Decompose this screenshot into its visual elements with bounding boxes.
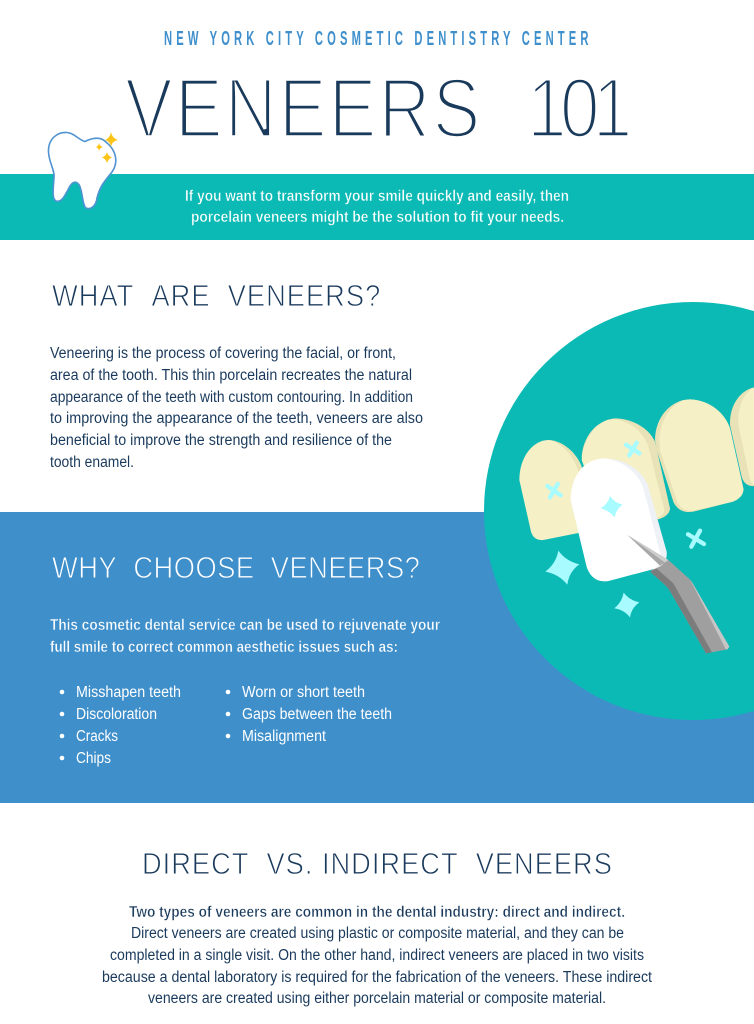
paragraph: what are veneers: appearance of the teeth with custom contouring. In addition [50, 389, 413, 406]
lead text: full smile to correct common aesthetic issues such as: [50, 639, 398, 656]
yellow tooth middle [582, 418, 670, 519]
list: left column: Discoloration [76, 706, 157, 723]
sparkles [545, 496, 639, 617]
paragraph: what are veneers: to improving the appearance of the teeth, veneers are also [50, 410, 423, 427]
paragraph: direct vs indirect: because a dental laboratory is required for the fabrication of the veneers. These indirect [102, 969, 653, 986]
paragraph: what are veneers: area of the tooth. This thin porcelain recreates the natural [50, 367, 412, 384]
paragraph: what are veneers [50, 345, 423, 471]
veneer [571, 458, 667, 581]
paragraph: direct vs indirect [102, 904, 653, 1007]
list: right column: Misalignment [242, 728, 327, 745]
paragraph: what are veneers: beneficial to improve the strength and resilience of the [50, 432, 392, 449]
yellow tooth large [655, 399, 743, 512]
list: left column: Cracks [76, 728, 118, 745]
far right tooth [730, 387, 754, 486]
intro text: If you want to transform your smile quickly and easily, then [185, 188, 569, 205]
paragraph: direct vs indirect: completed in a single visit. On the other hand, indirect veneers are placed in two visits [110, 947, 644, 964]
paragraph: direct vs indirect: veneers are created using either porcelain material or composite material. [148, 990, 606, 1007]
heading: what are veneers: WHAT ARE VENEERS? [52, 279, 380, 313]
title: VENEERS [125, 60, 480, 155]
list: right column: Worn or short teeth [242, 684, 365, 701]
lead text: This cosmetic dental service can be used to rejuvenate your [50, 617, 440, 634]
yellow tooth left [519, 440, 593, 540]
intro text [185, 188, 569, 226]
heading: direct vs indirect: DIRECT VS. INDIRECT VENEERS [142, 847, 612, 881]
list: right column: Gaps between the teeth [242, 706, 392, 723]
panel: why choose veneers [0, 512, 754, 803]
paragraph: what are veneers: Veneering is the process of covering the facial, or front, [50, 345, 396, 362]
list: left column: Chips [76, 750, 111, 767]
intro band [0, 174, 754, 240]
illustration: veneer placed on teeth [484, 302, 754, 720]
intro text: porcelain veneers might be the solution to fit your needs. [191, 209, 564, 226]
tweezers tip [627, 535, 668, 566]
title: 101 [527, 60, 632, 155]
list: left column [60, 684, 181, 767]
heading: why choose veneers: WHY CHOOSE VENEERS? [52, 551, 420, 585]
lead text [50, 617, 440, 656]
list: right column [226, 684, 392, 745]
list: left column: Misshapen teeth [76, 684, 181, 701]
paragraph: direct vs indirect: Direct veneers are created using plastic or composite material, and they can be [131, 925, 624, 942]
icon: sparkling tooth [48, 132, 118, 209]
tweezers lower blade [650, 560, 729, 653]
paragraph: what are veneers: tooth enamel. [50, 454, 134, 471]
paragraph: direct vs indirect: Two types of veneers are common in the dental industry: direct and indirect. [129, 904, 625, 921]
header eyebrow: NEW YORK CITY COSMETIC DENTISTRY CENTER [164, 28, 589, 50]
